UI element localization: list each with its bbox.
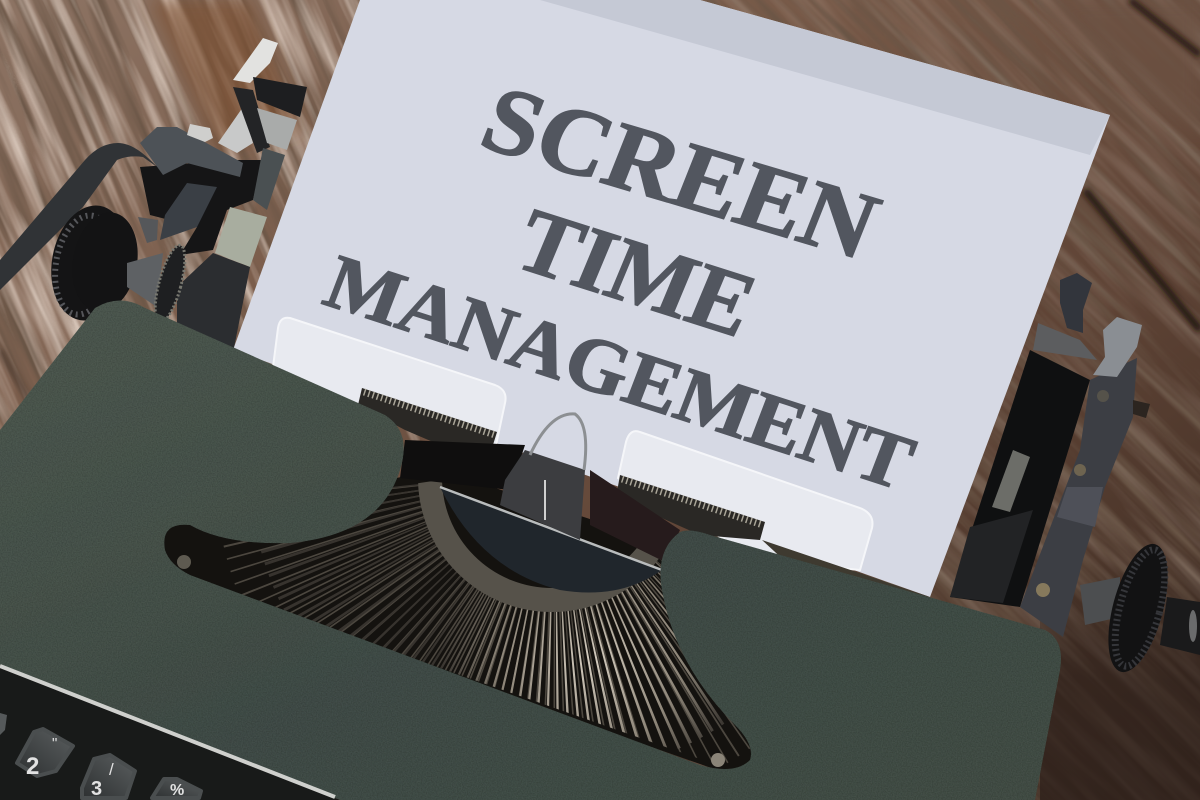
paper feed comb: right xyxy=(617,475,765,540)
paper guide: left xyxy=(272,318,506,450)
dark lever xyxy=(1060,273,1092,333)
title text: SCREEN TIME MANAGEMENT xyxy=(314,65,925,506)
icon: carriage return lever xyxy=(0,143,157,290)
key: edge xyxy=(0,713,7,735)
type guide xyxy=(500,450,585,540)
ribbon: left xyxy=(400,440,525,490)
right knob xyxy=(1080,577,1120,625)
key: 2: " xyxy=(52,735,57,752)
paper guide: right xyxy=(618,431,872,570)
black platen end xyxy=(950,510,1033,603)
heading: TIME: TIME xyxy=(502,189,770,356)
typebars: dim outer xyxy=(224,486,750,764)
small white knob xyxy=(187,124,213,142)
right carriage mechanism xyxy=(950,273,1200,678)
heading: SCREEN: SCREEN xyxy=(468,65,893,279)
key: 2 xyxy=(17,729,73,780)
typebar basket opening xyxy=(164,477,751,769)
feed rollers and ribbon xyxy=(358,388,930,597)
key: 3: / xyxy=(109,760,114,779)
paper sheet xyxy=(233,0,1110,597)
platen roller xyxy=(177,253,250,353)
dark interior behind the paper xyxy=(950,350,1090,607)
left carriage mechanism xyxy=(0,38,307,353)
ribbon: right xyxy=(590,470,680,562)
chrome strip xyxy=(0,666,335,797)
key: percent: % xyxy=(170,782,184,799)
key: 3 xyxy=(82,755,135,800)
typewriter green body xyxy=(0,300,1061,800)
key: 2: 2 xyxy=(26,753,39,780)
key: percent xyxy=(152,779,201,799)
paper feed comb: left xyxy=(358,388,497,448)
metal bracket xyxy=(140,127,243,177)
keyboard area xyxy=(0,666,340,800)
paper bail right xyxy=(762,540,930,597)
key: 3: 3 xyxy=(91,778,102,800)
segment ring xyxy=(418,482,658,612)
paper top band xyxy=(540,0,1110,155)
chrome collar xyxy=(127,253,163,307)
heading: MANAGEMENT: MANAGEMENT xyxy=(314,238,925,506)
chrome lever xyxy=(1093,317,1142,377)
side plate xyxy=(1020,358,1137,637)
pale block xyxy=(215,207,267,267)
typebars: bright centre xyxy=(261,484,724,749)
dark bracket interior xyxy=(140,160,262,255)
upper black roller xyxy=(253,77,307,117)
screw xyxy=(177,555,191,569)
platen knob xyxy=(43,199,137,327)
upper release lever xyxy=(233,38,278,83)
wire card holder xyxy=(530,414,586,470)
segment bowl xyxy=(440,487,662,592)
